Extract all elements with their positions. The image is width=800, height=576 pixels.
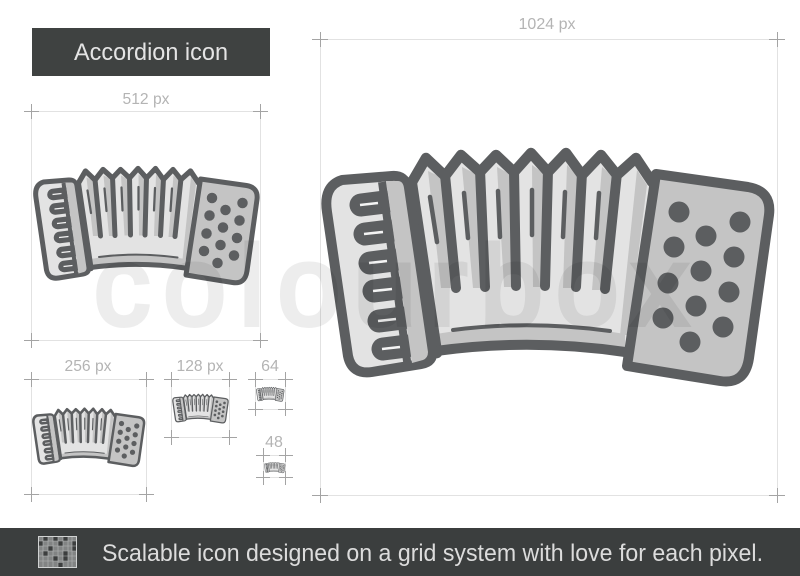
- panel: 512 px icon: [24, 91, 268, 348]
- size label: 512 px: 512 px: [122, 91, 170, 108]
- measurement guides: 512 px: [24, 104, 268, 348]
- panel: 64 px icon: [248, 358, 293, 416]
- measurement guides: 48 px: [256, 448, 293, 485]
- panel: 256 px icon: [24, 358, 154, 502]
- size label: 1024 px: 1024 px: [518, 16, 576, 33]
- measurement guides: 64 px: [248, 372, 293, 416]
- measurement guides: 256 px: [24, 372, 154, 502]
- measurement guides: 1024 px: [312, 32, 785, 503]
- footer bar: [0, 528, 800, 576]
- panel: 48 px icon: [256, 434, 293, 485]
- title banner: Accordion icon: [74, 39, 228, 66]
- icon: accordion 128 px: [173, 394, 228, 423]
- title banner: [32, 28, 270, 76]
- icon: accordion 48 px: [264, 462, 285, 473]
- size label: 256 px: 256 px: [64, 358, 112, 375]
- icon: accordion 64 px: [256, 387, 284, 401]
- icon: accordion 512 px: [36, 168, 257, 283]
- icon: accordion 256 px: [33, 409, 144, 466]
- measurement guides: 128 px: [164, 372, 237, 445]
- icon: pixel grid: [38, 536, 77, 568]
- panel: 1024 px icon: [312, 16, 785, 503]
- watermark: colourbox: [94, 224, 688, 348]
- footer tagline: Scalable icon designed on a grid system with love for each pixel.: [102, 540, 763, 567]
- size label: 48: 48: [265, 434, 283, 451]
- size label: 128 px: 128 px: [176, 358, 224, 375]
- icon: accordion 1024 px: [326, 153, 769, 382]
- panel: 128 px icon: [164, 358, 237, 445]
- size label: 64: 64: [261, 358, 279, 375]
